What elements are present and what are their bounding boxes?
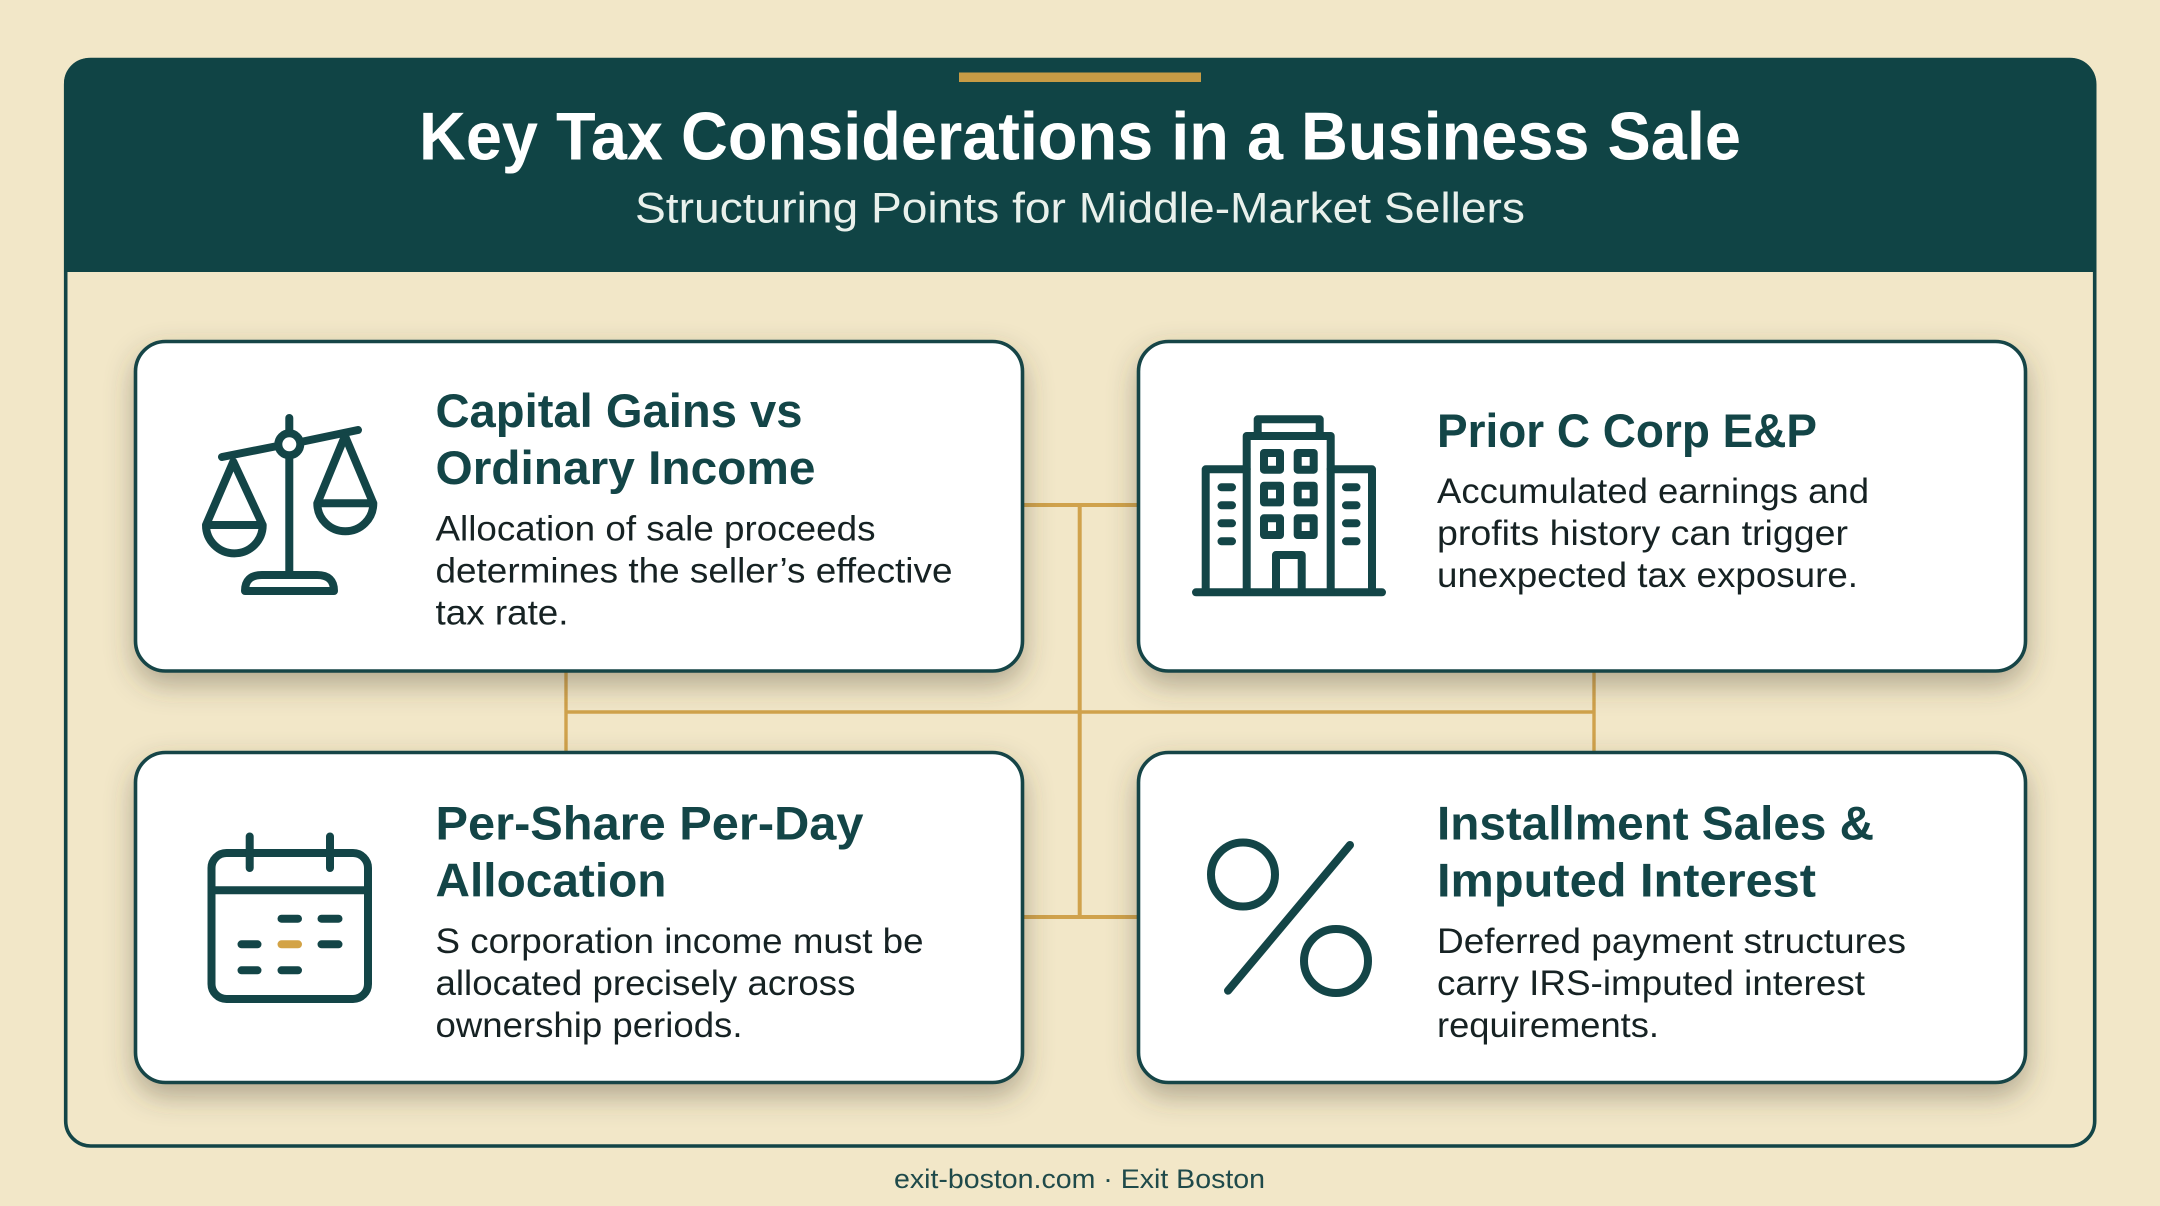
highlighted day: [282, 940, 298, 948]
title: Key Tax Considerations in a Business Sale: [419, 98, 1741, 174]
icon: balance scale: [206, 418, 373, 591]
body text: ownership periods.: [436, 1006, 742, 1045]
footer: exit-boston.com · Exit Boston: [894, 1164, 1265, 1194]
body text: tax rate.: [436, 593, 568, 632]
icon: calendar: [212, 836, 368, 999]
body text: requirements.: [1437, 1006, 1659, 1045]
subtitle: Structuring Points for Middle-Market Sellers: [635, 184, 1525, 232]
body text: allocated precisely across: [436, 964, 856, 1003]
heading: [1437, 796, 1874, 906]
body text: Accumulated earnings and: [1437, 472, 1869, 511]
heading: Imputed Interest: [1437, 854, 1816, 906]
body text: [1437, 922, 1906, 1045]
body text: [1437, 472, 1869, 595]
heading: Allocation: [436, 854, 666, 906]
icon: office building: [1196, 419, 1382, 592]
heading: Ordinary Income: [436, 441, 816, 494]
panel: per-share per-day allocation: [136, 752, 1022, 1082]
heading: Per-Share Per-Day: [436, 796, 864, 850]
body text: Allocation of sale proceeds: [436, 509, 876, 548]
header accent bar: [959, 72, 1201, 82]
heading: Prior C Corp E&P: [1437, 404, 1817, 457]
heading: Capital Gains vs: [436, 384, 802, 437]
body text: [436, 509, 952, 632]
panel: prior c corp e&p: [1138, 342, 2026, 671]
body text: profits history can trigger: [1437, 514, 1848, 553]
panel: capital gains vs ordinary income: [136, 342, 1022, 671]
body text: Deferred payment structures: [1437, 922, 1906, 961]
panel: installment sales & imputed interest: [1138, 752, 2026, 1082]
heading: [436, 796, 864, 906]
body text: unexpected tax exposure.: [1437, 556, 1858, 595]
body text: S corporation income must be: [436, 922, 924, 961]
header banner: [64, 58, 2096, 272]
connector lines: [566, 505, 1594, 917]
body text: [436, 922, 924, 1045]
body text: carry IRS-imputed interest: [1437, 964, 1865, 1003]
heading: Installment Sales &: [1437, 796, 1874, 850]
body text: determines the seller’s effective: [436, 551, 952, 590]
icon: percent sign: [1211, 842, 1368, 993]
heading: [436, 384, 816, 494]
